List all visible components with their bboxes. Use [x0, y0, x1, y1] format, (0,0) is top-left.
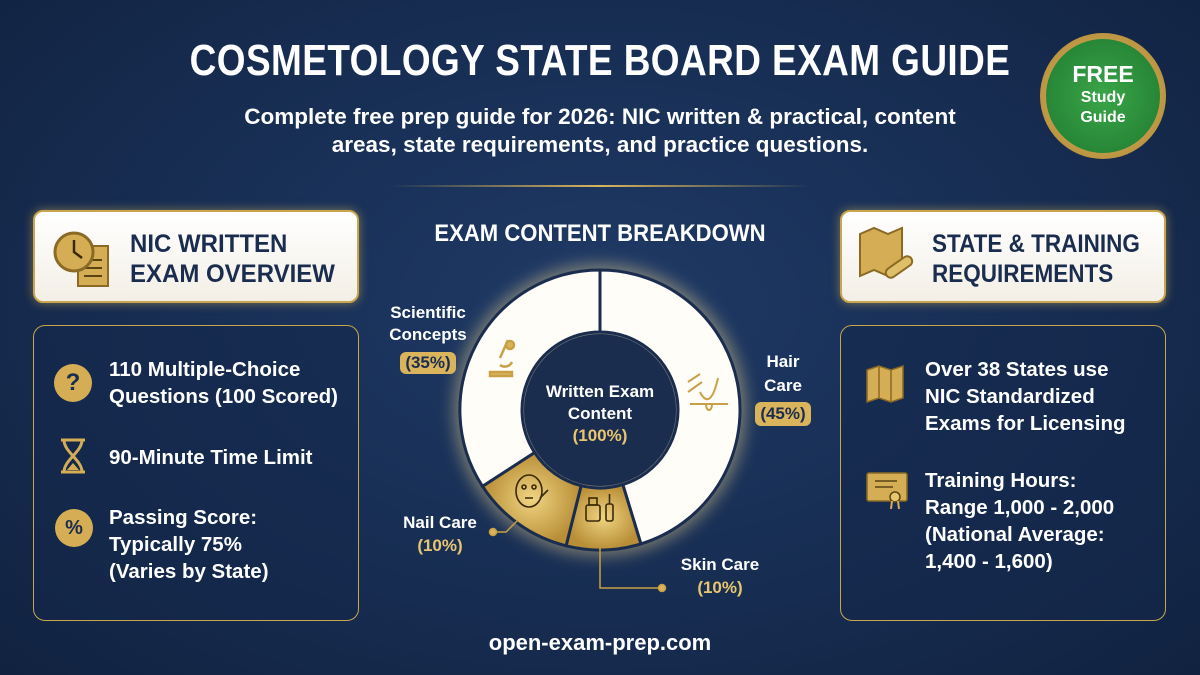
- text: questions: Questions (100 Scored): [109, 385, 338, 408]
- label: scientific concepts: Scientific: [390, 303, 466, 322]
- center label: Written Exam: [546, 382, 654, 401]
- text: training hours: Training Hours:: [925, 469, 1076, 492]
- label: scientific concepts: Concepts: [389, 325, 467, 344]
- leader lines: [490, 520, 666, 592]
- text: training hours: (National Average:: [925, 523, 1105, 546]
- text: training hours: 1,400 - 1,600): [925, 550, 1053, 573]
- segment: skin care: [566, 485, 641, 550]
- badge: free study guide: [1040, 33, 1166, 159]
- segment: nail care: [482, 452, 581, 546]
- icon: face mask: [516, 475, 548, 507]
- panel: NIC details: [33, 325, 359, 621]
- text: time limit: 90-Minute Time Limit: [109, 446, 313, 469]
- subtitle: [244, 104, 956, 157]
- panel header: NIC written: NIC WRITTEN: [130, 230, 287, 258]
- panel header: state & training: REQUIREMENTS: [932, 260, 1113, 288]
- label: hair care: Care: [764, 376, 802, 395]
- text: states: NIC Standardized: [925, 385, 1095, 408]
- label: skin care: Skin Care: [681, 555, 759, 574]
- segment: scientific concepts: [460, 270, 600, 486]
- label: skin care: [681, 555, 759, 597]
- label: nail care: [403, 513, 477, 555]
- panel header: state & training: STATE & TRAINING: [932, 230, 1140, 258]
- badge: free study guide: Study: [1081, 89, 1125, 106]
- chart heading: EXAM CONTENT BREAKDOWN: [434, 220, 766, 247]
- center label: Content: [568, 404, 632, 423]
- panel header: NIC written: [33, 210, 359, 303]
- label: nail care: (10%): [417, 536, 463, 555]
- icon: hourglass: [61, 438, 85, 474]
- icon: nail polish: [586, 494, 613, 521]
- icon: map diploma: [859, 226, 914, 279]
- text: states: Exams for Licensing: [925, 412, 1126, 435]
- icon: certificate: [866, 472, 908, 510]
- icon: map: [866, 365, 904, 403]
- icon: clock document: [54, 232, 109, 287]
- text: training hours: [925, 469, 1114, 573]
- icon: question: ?: [66, 369, 80, 396]
- label: scientific concepts: [389, 303, 467, 374]
- badge: free study guide: FREE: [1072, 61, 1134, 87]
- center label: [546, 382, 654, 445]
- icon: question: [54, 364, 92, 402]
- subtitle: areas, state requirements, and practice questions.: [332, 132, 868, 157]
- panel: state details: [840, 325, 1166, 621]
- label: hair care: (45%): [760, 404, 806, 423]
- icon: percent badge: [55, 509, 93, 547]
- panel header: NIC written: EXAM OVERVIEW: [130, 260, 335, 288]
- text: states: [925, 358, 1126, 435]
- divider: [390, 185, 810, 187]
- text: passing score: Passing Score:: [109, 506, 257, 529]
- text: passing score: [109, 506, 269, 583]
- text: questions: [109, 358, 338, 408]
- text: states: Over 38 States use: [925, 358, 1108, 381]
- icon: comb hair: [688, 374, 728, 410]
- text: training hours: Range 1,000 - 2,000: [925, 496, 1114, 519]
- subtitle: Complete free prep guide for 2026: NIC written & practical, content: [244, 104, 956, 129]
- panel header: state & training: [840, 210, 1166, 303]
- title: COSMETOLOGY STATE BOARD EXAM GUIDE: [190, 36, 1010, 85]
- badge: free study guide: Guide: [1080, 109, 1126, 126]
- label: hair care: [755, 352, 811, 426]
- text: questions: 110 Multiple-Choice: [109, 358, 300, 381]
- text: passing score: Typically 75%: [109, 533, 242, 556]
- text: passing score: (Varies by State): [109, 560, 269, 583]
- icon: percent badge: %: [65, 517, 83, 539]
- label: hair care: Hair: [766, 352, 800, 371]
- segment: hair care: [600, 270, 740, 544]
- footer url: open-exam-prep.com: [489, 630, 711, 655]
- label: scientific concepts: (35%): [405, 353, 451, 372]
- label: skin care: (10%): [697, 578, 743, 597]
- center label: (100%): [573, 426, 627, 445]
- label: nail care: Nail Care: [403, 513, 477, 532]
- icon: microscope: [490, 340, 514, 376]
